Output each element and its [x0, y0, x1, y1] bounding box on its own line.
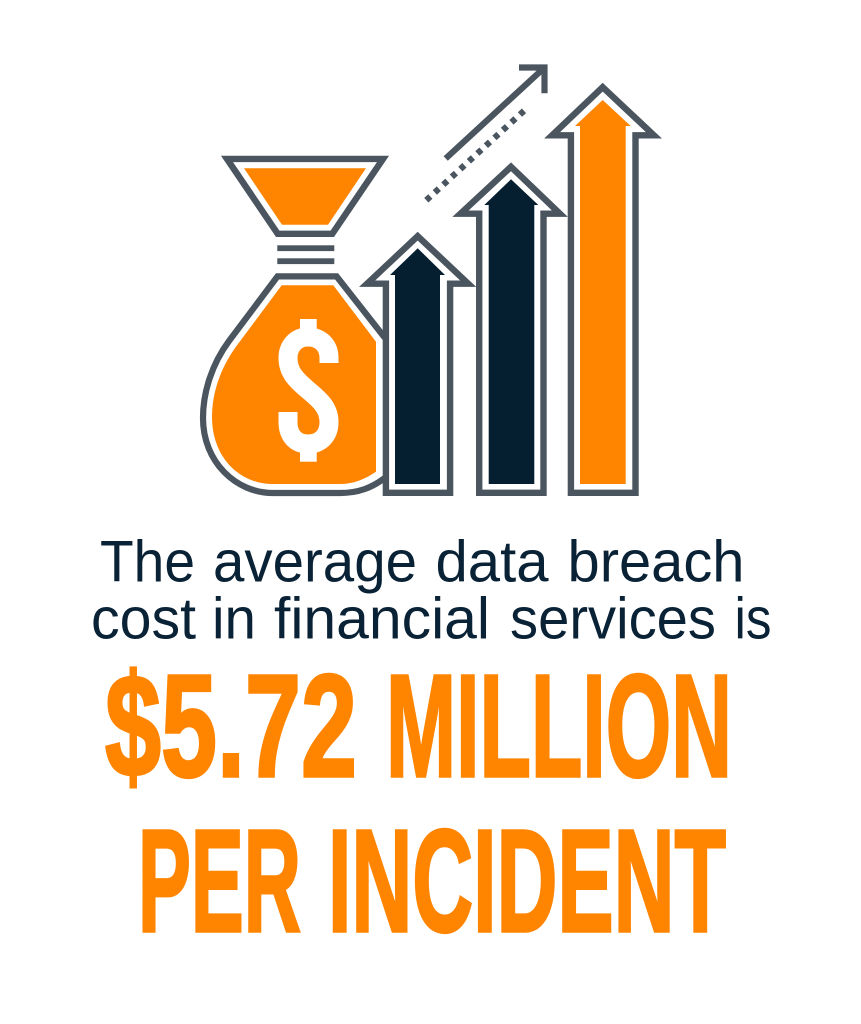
text block: intro sentence: services	[510, 586, 716, 651]
headline: cost amount: $5.72	[105, 644, 357, 807]
text block: intro sentence: financial	[274, 586, 490, 651]
icon: money bag with rising arrows	[203, 68, 654, 493]
icon: short navy arrow	[367, 236, 468, 493]
headline: cost amount	[105, 644, 732, 807]
headline: per incident	[138, 799, 726, 962]
icon: money bag	[203, 159, 386, 493]
text block: intro sentence: data	[436, 530, 549, 595]
text block: intro sentence: cost	[91, 586, 196, 651]
text block: intro sentence	[91, 530, 772, 651]
text block: intro sentence: is	[734, 586, 772, 651]
icon: medium navy arrow	[460, 167, 560, 493]
icon: dollar sign	[288, 319, 329, 462]
text block: intro sentence: breach	[568, 530, 744, 595]
text block: intro sentence: The	[100, 530, 195, 595]
headline: per incident: PER	[138, 799, 301, 962]
icon: trend arrow	[426, 68, 544, 200]
text block: intro sentence: in	[212, 586, 256, 651]
icon: tall orange arrow	[552, 87, 654, 493]
text block: intro sentence: average	[213, 530, 417, 595]
